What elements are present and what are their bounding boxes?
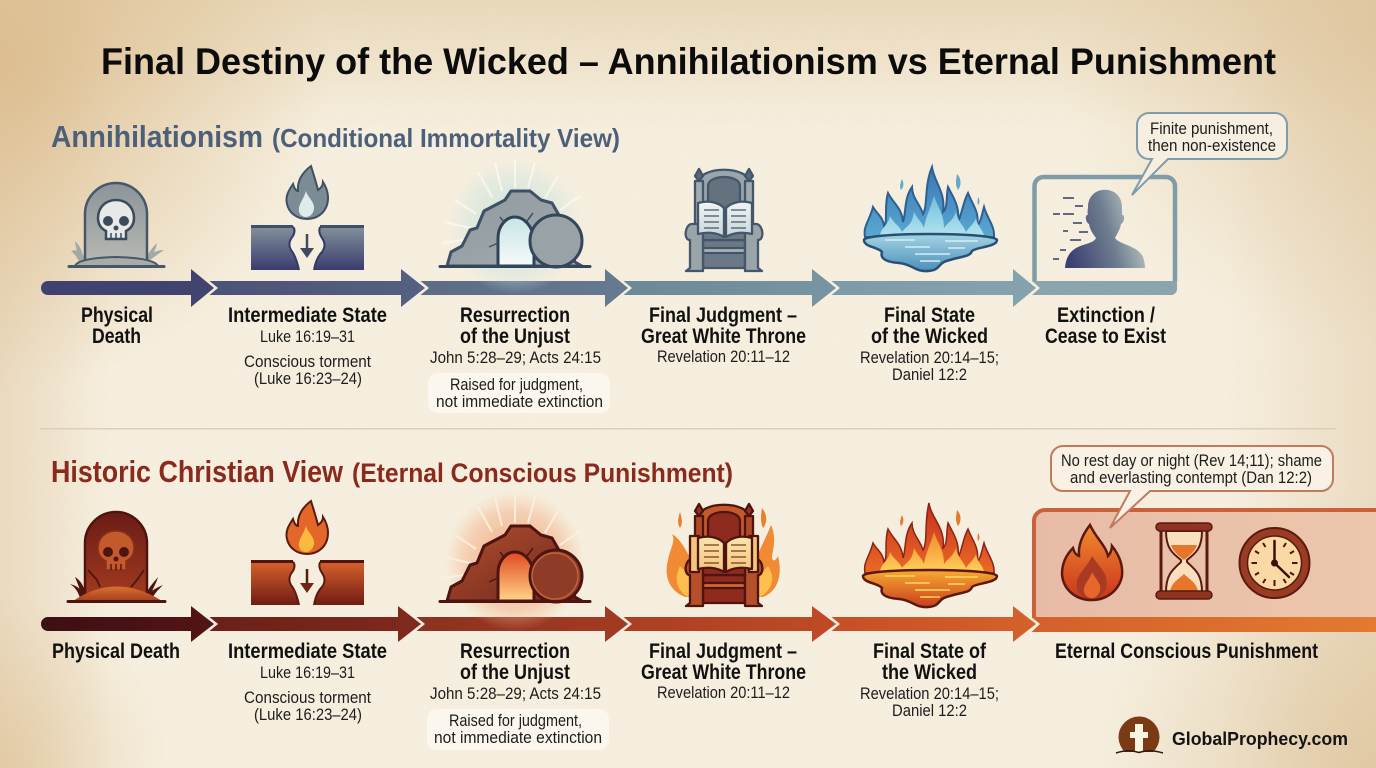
icon: lake of fire (blue) <box>864 167 997 271</box>
icon: open tomb with light <box>440 158 590 294</box>
label: final state of the wicked: Final State <box>884 304 975 327</box>
label: final state of the wicked: Final State of <box>873 640 987 663</box>
label: intermediate state: Intermediate State <box>228 640 387 663</box>
label: physical death: Physical Death <box>52 640 180 663</box>
label: intermediate state: Luke 16:19–31 <box>260 664 355 682</box>
label: final judgment: Revelation 20:11–12 <box>657 684 790 702</box>
label: final state of the wicked: the Wicked <box>882 661 977 684</box>
label: final judgment <box>641 304 806 366</box>
callout: no rest day or night <box>1051 446 1333 528</box>
callout: no rest day or night: and everlasting contempt (Dan 12:2) <box>1070 468 1312 487</box>
label: final judgment: Final Judgment – <box>649 304 797 327</box>
heading: historic christian view: Historic Christian View <box>51 454 344 489</box>
panel: historic christian view <box>41 446 1376 750</box>
label: intermediate state: (Luke 16:23–24) <box>254 706 362 724</box>
label: resurrection of the unjust: John 5:28–29; Acts 24:15 <box>430 349 601 367</box>
label: final judgment <box>641 640 806 702</box>
section divider <box>40 428 1336 430</box>
logo: globalprophecy.com: GlobalProphecy.com <box>1172 728 1348 749</box>
icon: hourglass <box>1156 523 1212 599</box>
label: resurrection of the unjust <box>427 640 609 750</box>
label: final judgment: Final Judgment – <box>649 640 797 663</box>
label: resurrection of the unjust: John 5:28–29; Acts 24:15 <box>430 685 601 703</box>
label: extinction: Extinction / <box>1057 304 1155 327</box>
label: intermediate state <box>228 304 387 388</box>
label: physical death: Physical <box>81 304 153 327</box>
icon: lake of fire (red) <box>863 503 997 607</box>
label: resurrection of the unjust: Resurrection <box>460 640 570 663</box>
label: intermediate state <box>228 640 387 724</box>
label: resurrection of the unjust: Raised for judgment, <box>449 711 582 730</box>
callout: finite punishment: Finite punishment, <box>1150 119 1273 138</box>
icon: gravestone with skull (red) <box>68 512 165 602</box>
label: intermediate state: Conscious torment <box>244 353 371 371</box>
icon: clock <box>1240 528 1310 598</box>
label: intermediate state: Luke 16:19–31 <box>260 328 355 346</box>
label: final state of the wicked <box>860 304 999 384</box>
title: Final Destiny of the Wicked – Annihilationism vs Eternal Punishment <box>101 41 1276 82</box>
label: final state of the wicked: Daniel 12:2 <box>892 702 967 720</box>
label: resurrection of the unjust: Resurrection <box>460 304 570 327</box>
icon: gravestone with skull <box>69 183 164 266</box>
heading: annihilationism <box>51 119 620 154</box>
heading: annihilationism: Annihilationism <box>51 119 263 154</box>
label: final judgment: Great White Throne <box>641 661 806 684</box>
label: intermediate state: Conscious torment <box>244 689 371 707</box>
label: resurrection of the unjust: of the Unjust <box>460 325 570 348</box>
label: final state of the wicked: of the Wicked <box>871 325 988 348</box>
icon: flame over chasm <box>251 166 364 270</box>
logo: globalprophecy.com <box>1116 717 1348 753</box>
heading: historic christian view: (Eternal Conscious Punishment) <box>352 458 733 488</box>
label: final state of the wicked: Revelation 20:14–15; <box>860 349 999 367</box>
label: extinction <box>1045 304 1166 348</box>
label: physical death: Death <box>92 325 141 348</box>
label: final judgment: Revelation 20:11–12 <box>657 348 790 366</box>
label: physical death <box>81 304 153 348</box>
label: eternal conscious punishment: Eternal Conscious Punishment <box>1055 640 1318 663</box>
label: resurrection of the unjust: of the Unjust <box>460 661 570 684</box>
label: extinction: Cease to Exist <box>1045 325 1166 348</box>
label: final state of the wicked <box>860 640 999 720</box>
icon: throne with book and flames <box>667 504 780 606</box>
panel: annihilationism view <box>41 113 1287 413</box>
label: resurrection of the unjust: not immediate extinction <box>436 392 603 411</box>
label: intermediate state: Intermediate State <box>228 304 387 327</box>
label: final state of the wicked: Daniel 12:2 <box>892 366 967 384</box>
icon: fading person in frame <box>1032 177 1177 295</box>
icon: flame over chasm (red) <box>251 501 364 605</box>
label: final state of the wicked: Revelation 20:14–15; <box>860 685 999 703</box>
icon: eternal flame <box>1062 525 1122 600</box>
callout: finite punishment: then non-existence <box>1148 136 1276 155</box>
callout: no rest day or night: No rest day or night (Rev 14;11); shame <box>1061 451 1322 470</box>
panel: eternal punishment box <box>1034 510 1376 618</box>
label: resurrection of the unjust: Raised for judgment, <box>450 375 583 394</box>
label: intermediate state: (Luke 16:23–24) <box>254 370 362 388</box>
timeline arrow: historic view <box>41 606 1376 642</box>
callout: finite punishment <box>1132 113 1287 195</box>
heading: annihilationism: (Conditional Immortality View) <box>272 123 620 153</box>
label: final judgment: Great White Throne <box>641 325 806 348</box>
heading: historic christian view <box>51 454 733 489</box>
timeline arrow: annihilationism <box>41 269 1036 307</box>
label: resurrection of the unjust: not immediate extinction <box>434 728 602 747</box>
label: resurrection of the unjust <box>428 304 610 413</box>
icon: open tomb with fire glow <box>440 491 590 631</box>
icon: great white throne with book <box>686 169 762 271</box>
